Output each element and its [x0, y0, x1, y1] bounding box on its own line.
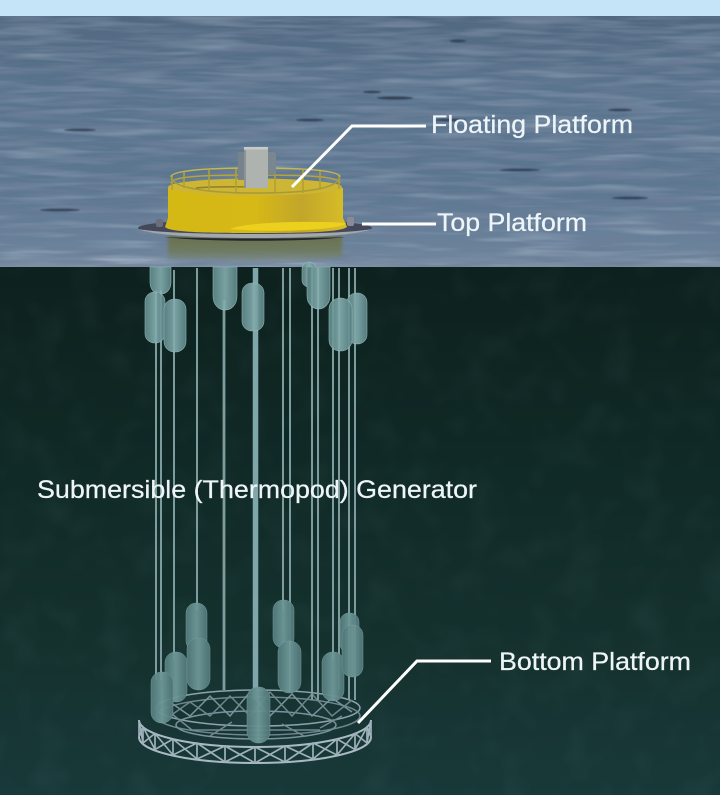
equipment box — [238, 147, 276, 188]
sea surface — [0, 16, 720, 268]
top platform disk — [138, 217, 372, 241]
top platform reflection — [168, 236, 342, 261]
underwater background — [0, 267, 720, 795]
mooring lines — [156, 268, 355, 700]
railing — [171, 168, 340, 194]
upper floats — [145, 262, 367, 352]
lower floats — [151, 600, 363, 743]
leader line: top platform — [362, 222, 436, 226]
leader line: bottom platform — [358, 661, 491, 723]
label: submersible generator: Submersible (Thermopod) Generator — [37, 476, 477, 504]
label: bottom platform: Bottom Platform — [499, 648, 691, 676]
leader line: floating platform — [292, 126, 426, 187]
floating platform yellow body — [165, 178, 347, 233]
label: top platform: Top Platform — [437, 209, 587, 237]
back bottom platform ring — [156, 690, 360, 739]
sky — [0, 0, 720, 17]
bottom platform truss — [139, 720, 371, 763]
label: floating platform: Floating Platform — [431, 111, 633, 139]
